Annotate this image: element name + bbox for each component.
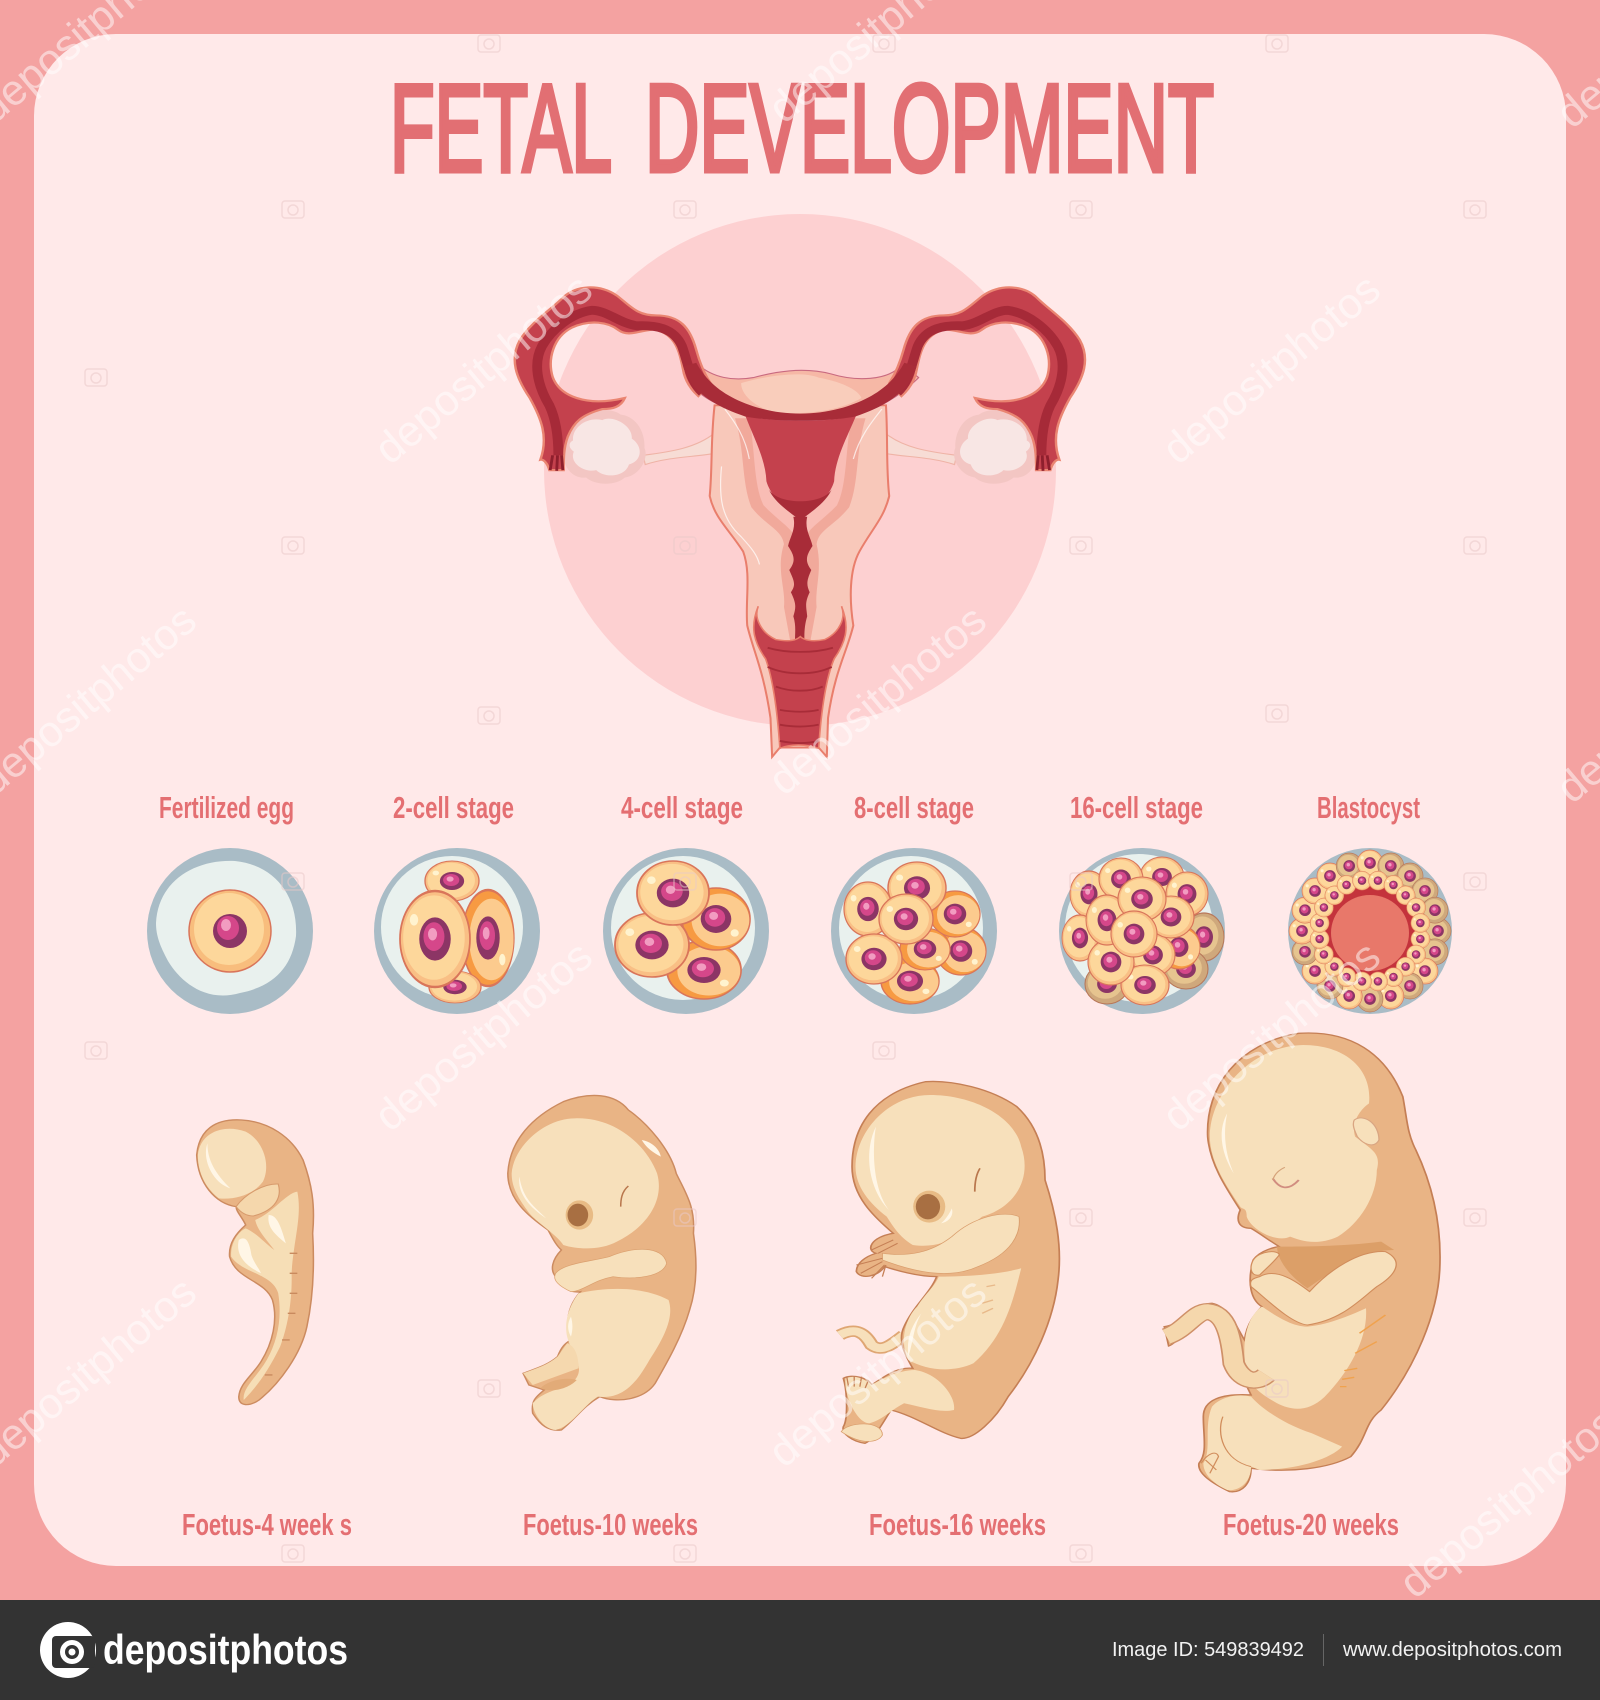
stock watermarks: depositphotos (366, 932, 602, 1141)
footer bar (0, 1600, 1600, 1700)
fetus: 20 weeks (1164, 1033, 1440, 1492)
stock watermarks: depositphotos (760, 596, 996, 805)
right ovary (885, 410, 1037, 484)
uterus background circle (544, 214, 1056, 726)
stock watermarks: depositphotos (366, 265, 602, 474)
title: DEVELOPMENT (645, 60, 1214, 198)
label: 2-cell stage: 2-cell stage (393, 790, 514, 825)
footer image id: Image ID: 549839492 (1112, 1639, 1304, 1661)
fetus labels (182, 1507, 1399, 1542)
fundus dark band (683, 363, 917, 421)
vagina (754, 606, 846, 748)
label: 4-cell stage: 4-cell stage (621, 790, 743, 825)
footer logo icon (40, 1622, 96, 1678)
title (390, 60, 1214, 198)
inner muscle layer (735, 418, 866, 640)
uterine body and vaginal wall (710, 405, 889, 757)
fertilized egg (147, 848, 313, 1014)
footer divider (1323, 1634, 1324, 1666)
label: blastocyst: Blastocyst (1317, 790, 1420, 825)
stock watermarks: depositphotos (1154, 265, 1390, 474)
label: foetus 20 weeks: Foetus-20 weeks (1223, 1507, 1399, 1542)
uterine cavity (745, 415, 856, 519)
cavity lower shading (769, 489, 832, 520)
blastocyst (1288, 848, 1452, 1014)
fundus (686, 365, 919, 421)
stock watermarks: depositphotos (1154, 932, 1390, 1141)
fetus: 16 weeks (840, 1081, 1059, 1443)
footer logo text: depositphotos (103, 1626, 348, 1673)
uterus anatomy illustration (515, 287, 1085, 757)
cavity lining (749, 418, 851, 535)
cervical canal (788, 517, 813, 640)
right fallopian tube (889, 287, 1085, 471)
label: 16-cell stage: 16-cell stage (1070, 790, 1203, 825)
label: fertilized egg: Fertilized egg (159, 790, 294, 825)
label: 8-cell stage: 8-cell stage (854, 790, 974, 825)
stock watermarks: depositphotos (760, 1268, 996, 1477)
label: foetus 4 weeks: Foetus-4 week s (182, 1507, 352, 1542)
fetus: 10 weeks (508, 1095, 696, 1430)
vaginal rugae (768, 648, 833, 743)
2-cell stage (374, 848, 540, 1014)
stage labels (159, 790, 1420, 825)
fundus inner highlight (741, 374, 861, 413)
left fallopian tube (515, 287, 711, 471)
title: FETAL (390, 60, 612, 198)
label: foetus 16 weeks: Foetus-16 weeks (869, 1507, 1046, 1542)
4-cell stage (603, 848, 769, 1014)
8-cell stage (831, 848, 997, 1014)
fetus: 4 weeks (197, 1120, 313, 1405)
wall highlights (721, 409, 882, 564)
footer website: www.depositphotos.com (1342, 1639, 1562, 1661)
left ovary (563, 410, 715, 484)
16-cell stage (1059, 848, 1225, 1014)
label: foetus 10 weeks: Foetus-10 weeks (523, 1507, 698, 1542)
